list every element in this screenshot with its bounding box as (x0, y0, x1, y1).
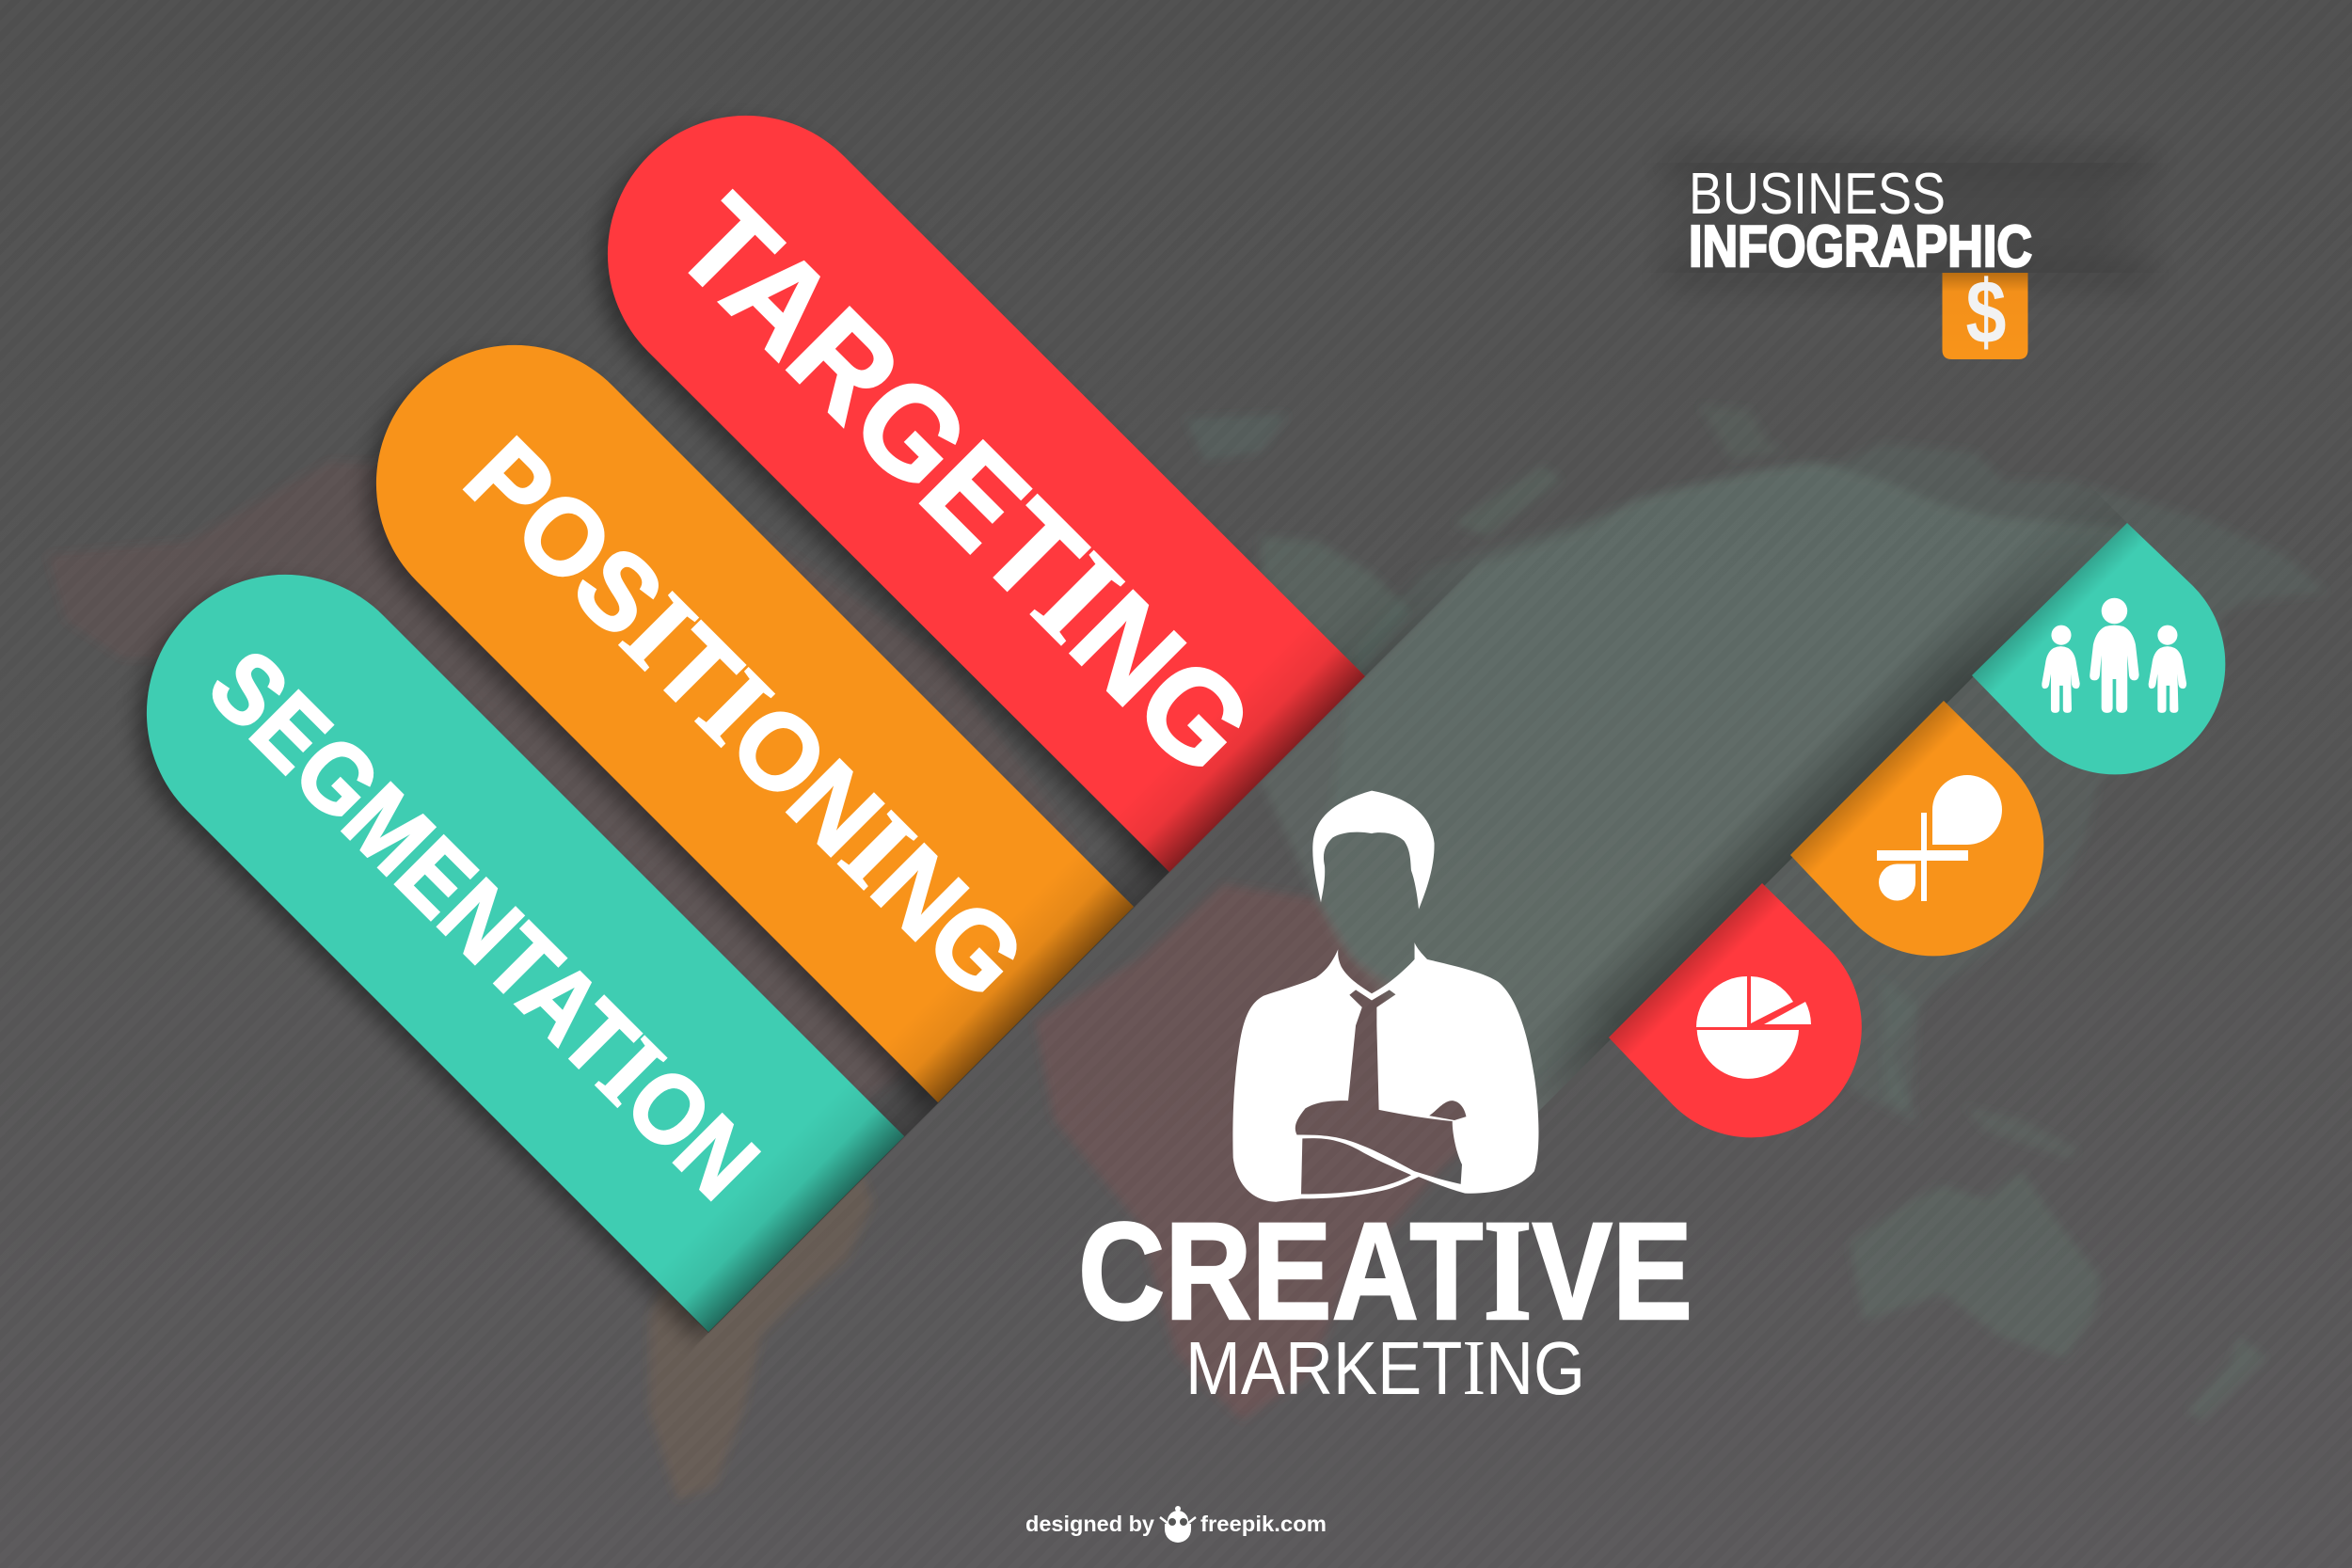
map: Scandinavia (1454, 466, 1562, 536)
band shadow along droplet line (1552, 527, 2122, 1089)
panel: teal droplet with people icon (1972, 523, 2225, 774)
label: POSITIONING: POSITIONING (441, 413, 1050, 1022)
heading: CREATIVE: CREATIVE (1078, 1190, 1692, 1351)
map: Arctic islands (1698, 404, 1788, 461)
credit: designed by freepik.com (1025, 1506, 1327, 1543)
world map (47, 404, 2328, 1500)
map: Eurasia (1317, 442, 2328, 1125)
panel: red droplet with pie chart (1609, 883, 1862, 1137)
icon: three people (2042, 598, 2186, 713)
pill shadows (130, 122, 1168, 1343)
icon: plus with two drops (1877, 775, 2002, 901)
tab: orange dollar (1942, 261, 2028, 363)
map: North America (47, 461, 1082, 1176)
map: South America (649, 1129, 873, 1500)
credit: designed by freepik.com: designed by (1025, 1512, 1154, 1536)
icon: pie chart (1696, 976, 1811, 1079)
map: Western Europe (1261, 536, 1411, 724)
icon: businessman silhouette (1232, 791, 1538, 1202)
map: Australia (1850, 1171, 2101, 1358)
panel: segmentation pill (147, 575, 904, 1332)
label: SEGMENTATION: SEGMENTATION (186, 627, 781, 1221)
band shadow along pill cut line (681, 621, 1417, 1333)
heading: MARKETING: MARKETING (1185, 1324, 1585, 1412)
panel: orange droplet with plus icon (1790, 701, 2043, 956)
lighter central band over Eurasia (1261, 461, 2164, 1124)
panel: targeting pill (608, 116, 1365, 872)
credit: designed by freepik.com: freepik.com (1200, 1512, 1327, 1536)
map: Philippines (1882, 978, 1919, 1110)
map: Greenland (1185, 414, 1289, 461)
icon: freepik mascot (1160, 1506, 1196, 1543)
panel: business infographic band (1642, 150, 2173, 363)
map: Indonesia (1964, 1106, 2079, 1159)
map: Africa (1035, 884, 1524, 1420)
icon: dollar sign: $ (1966, 261, 2006, 363)
panel: positioning pill (376, 345, 1134, 1102)
heading: BUSINESS: BUSINESS (1689, 162, 1946, 227)
heading: INFOGRAPHIC: INFOGRAPHIC (1689, 214, 2032, 279)
map: New Zealand (2187, 1337, 2266, 1420)
label: TARGETING: TARGETING (647, 167, 1282, 802)
